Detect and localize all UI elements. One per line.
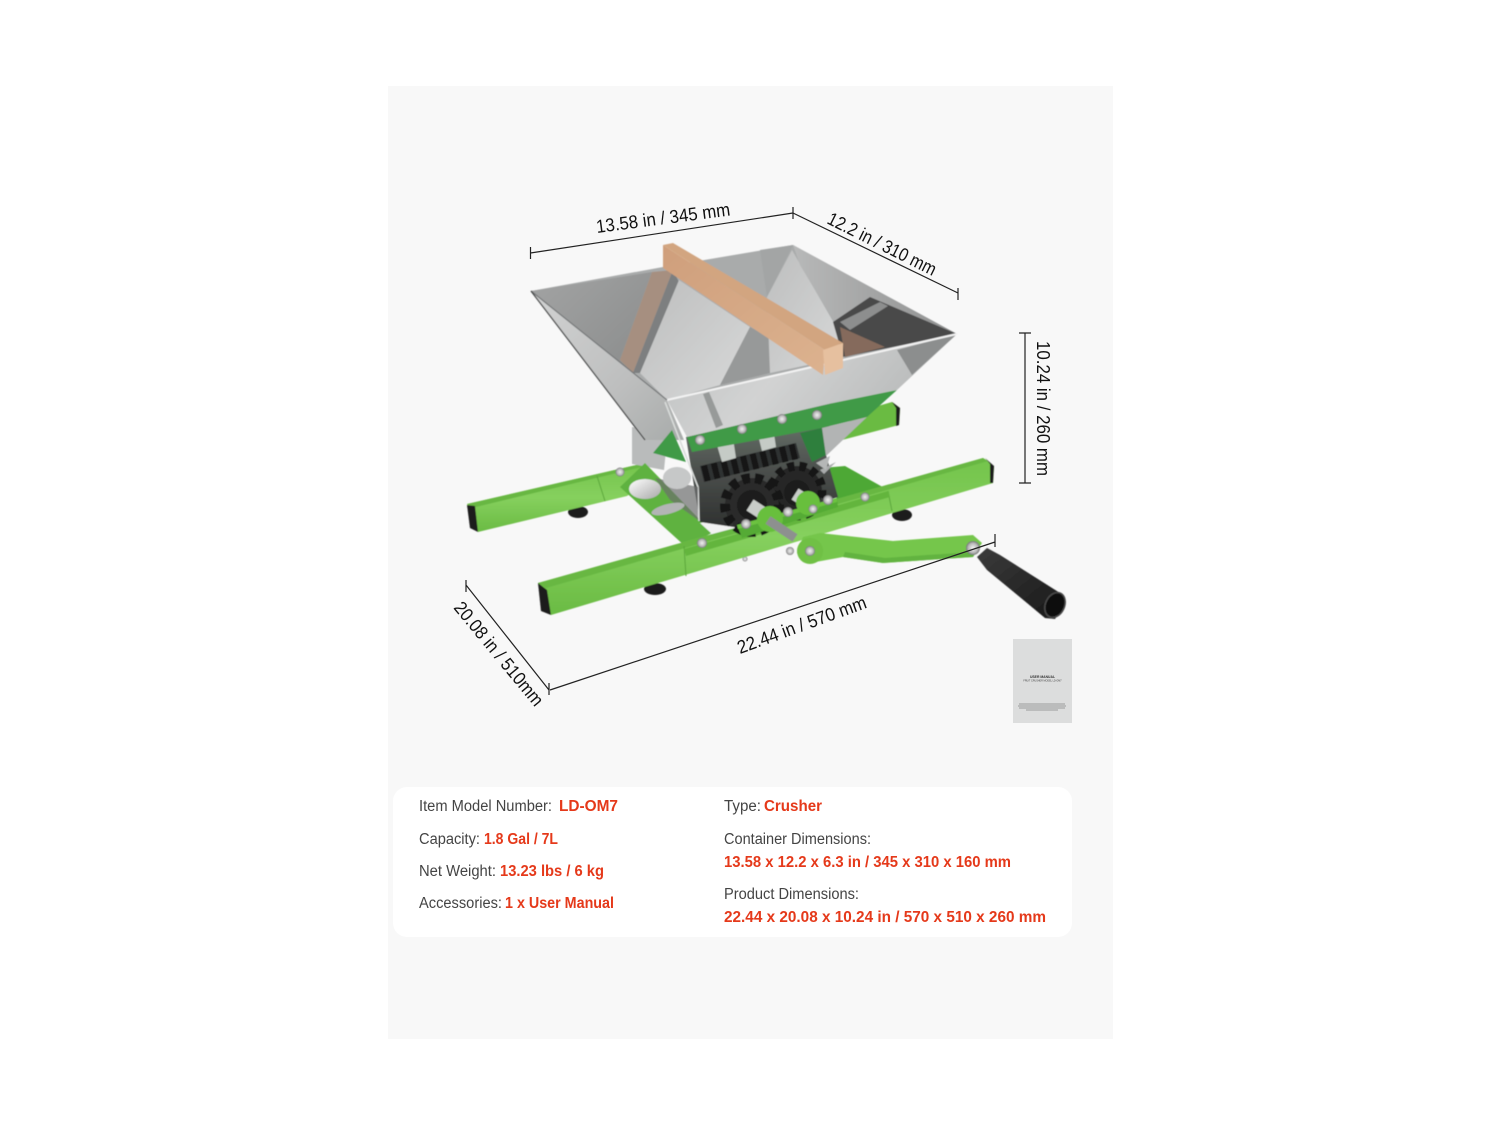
black handle grip: [977, 548, 1069, 621]
spec: accessories: [419, 895, 614, 912]
spec: capacity: 1.8 Gal / 7L: [484, 831, 558, 848]
spec: container dimensions: [724, 831, 1011, 871]
spec: net weight: Net Weight:: [419, 863, 496, 880]
front rail of frame: [538, 458, 994, 615]
dimension: 12.2 in depth: 12.2 in / 310 mm: [824, 208, 940, 280]
hopper left outer face: [531, 291, 684, 440]
glass front edge: [665, 402, 699, 521]
crank shaft: [768, 520, 795, 538]
spec: model number: LD-OM7: [559, 798, 618, 815]
spec: capacity: Capacity:: [419, 831, 480, 848]
white gap in base: [700, 518, 735, 534]
user manual booklet: FRUIT CRUSHER MODEL LD-OM7: [1023, 680, 1062, 682]
page panel background: [388, 86, 1113, 1039]
front gears: [725, 466, 822, 532]
dimension: 13.58 in width: [530, 199, 793, 259]
back rail of frame: [467, 402, 900, 532]
left base plate: [620, 463, 717, 547]
right base plate: [822, 466, 888, 505]
user manual booklet: [1013, 639, 1072, 723]
spec: type: Type:: [724, 798, 761, 815]
rubber feet: [644, 509, 912, 595]
spec: container dimensions: 13.58 x 12.2 x 6.3 in / 345 x 310 x 160 mm: [724, 854, 1011, 871]
spec: model number: Item Model Number:: [419, 798, 552, 815]
user manual booklet: USER MANUAL: [1030, 675, 1055, 679]
upper gear roller: [700, 427, 800, 482]
wing nuts: [629, 456, 836, 520]
dimension: 22.44 in base length: [550, 534, 995, 690]
green mounting band: [653, 390, 897, 462]
spec: accessories: Accessories:: [419, 895, 502, 912]
spec: capacity: [419, 831, 558, 848]
crank arm: [797, 533, 982, 564]
dimension: 20.08 in base depth: 20.08 in / 510mm: [450, 597, 548, 710]
bolts: [616, 410, 870, 548]
spec: type: [724, 798, 822, 815]
wooden bar: [663, 243, 843, 375]
rear metal chute: [632, 427, 668, 470]
dimension: 10.24 in height: [1019, 333, 1054, 483]
bearing block: [737, 491, 838, 538]
machine well behind glass: [686, 403, 838, 528]
spec: product dimensions: [724, 886, 1046, 926]
spec: net weight: 13.23 lbs / 6 kg: [500, 863, 604, 880]
specification card: [393, 787, 1072, 937]
under-rail bolts: [742, 547, 794, 562]
dimension: 10.24 in height: 10.24 in / 260 mm: [1033, 341, 1054, 476]
spec: product dimensions: 22.44 x 20.08 x 10.24 in / 570 x 510 x 260 mm: [724, 909, 1046, 926]
spec: container dimensions: Container Dimensions:: [724, 831, 871, 848]
dimension: 13.58 in width: 13.58 in / 345 mm: [595, 199, 731, 237]
spec: type: Crusher: [764, 798, 822, 815]
dimension: 22.44 in base length: 22.44 in / 570 mm: [734, 592, 869, 658]
hopper front face: [531, 291, 957, 440]
spec: net weight: [419, 863, 604, 880]
product illustration: fruit crusher: [467, 243, 1069, 621]
spec: product dimensions: Product Dimensions:: [724, 886, 859, 903]
hopper interior: [531, 245, 957, 400]
spec: accessories: 1 x User Manual: [505, 895, 614, 912]
